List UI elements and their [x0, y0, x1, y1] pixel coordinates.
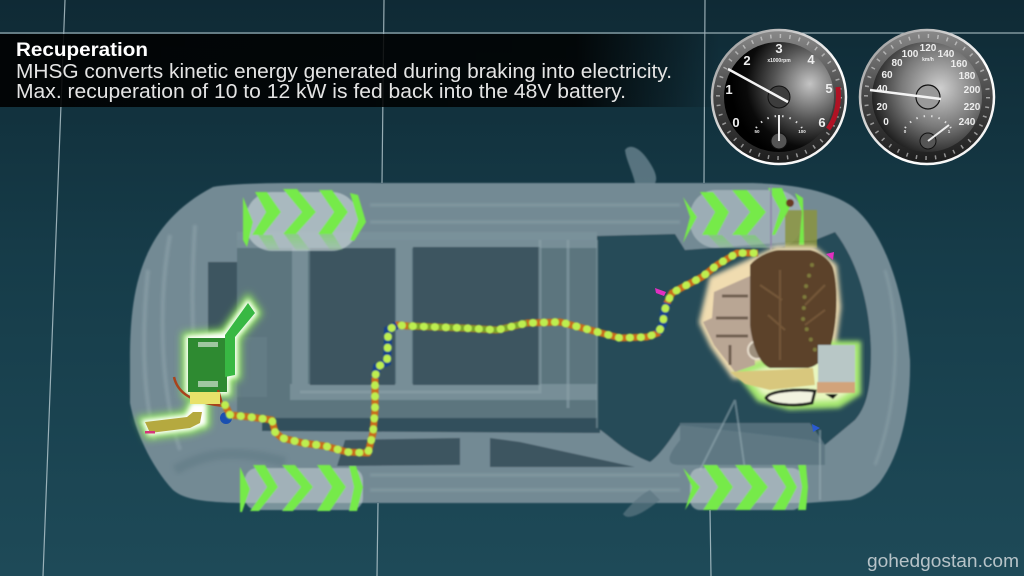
suspension struts	[700, 400, 820, 500]
roof frame	[237, 240, 597, 392]
rear streaks	[144, 225, 205, 450]
engine	[703, 250, 857, 406]
speedometer numerals: 1	[948, 129, 951, 134]
cabling	[174, 377, 225, 406]
speedometer numerals	[876, 43, 981, 134]
side mirror top	[625, 147, 656, 183]
frame highlights around windows	[300, 240, 568, 408]
speedometer numerals: 0	[883, 117, 889, 128]
tachometer numerals: 100	[798, 129, 806, 134]
car body x-ray	[130, 147, 910, 517]
wheel: rear bottom	[240, 465, 363, 512]
yellow cable tray	[145, 412, 202, 433]
speedometer numerals: 180	[959, 71, 976, 82]
speedometer numerals: 220	[964, 102, 981, 113]
speedometer numerals: 160	[951, 59, 968, 70]
tachometer numerals: 4	[807, 52, 815, 67]
tachometer numerals: 50	[754, 129, 760, 134]
description line 1: MHSG converts kinetic energy generated during braking into electricity.	[16, 61, 672, 83]
speedometer numerals: 200	[964, 85, 981, 96]
tachometer gauge	[712, 30, 846, 164]
pink end cap	[145, 431, 155, 434]
green glow	[740, 345, 857, 406]
energy flow chain	[225, 253, 758, 453]
redline arc	[828, 87, 838, 129]
battery case	[188, 338, 227, 392]
description line 2: Max. recuperation of 10 to 12 kW is fed back into the 48V battery.	[16, 81, 626, 103]
speedometer numerals: 40	[876, 84, 888, 95]
speedometer numerals: 0	[904, 129, 907, 134]
caption banner	[0, 34, 720, 107]
connector markers	[655, 252, 834, 432]
engine block detail	[703, 276, 755, 372]
speedometer numerals: 20	[876, 102, 888, 113]
wheel: front top	[683, 186, 817, 250]
heading: Recuperation	[16, 40, 148, 61]
transmission	[730, 368, 815, 390]
coolant sub-gauge	[756, 116, 802, 128]
hub and needle	[916, 85, 940, 109]
speedometer numerals: 80	[891, 58, 903, 69]
engine cover	[750, 250, 837, 368]
tachometer numerals: 1	[725, 82, 733, 97]
tachometer numerals: x1000rpm	[767, 58, 791, 64]
speedometer numerals: km/h	[922, 57, 934, 63]
battery terminals	[198, 342, 218, 387]
tachometer numerals: 5	[825, 81, 833, 96]
wheel: front bottom	[683, 465, 808, 510]
cream glow	[703, 250, 837, 375]
lower bracket	[190, 392, 220, 404]
tachometer numerals: 0	[732, 115, 740, 130]
engine bay	[597, 232, 871, 462]
tachometer numerals	[725, 41, 833, 134]
speedometer numerals: 140	[938, 49, 955, 60]
speedometer numerals: 240	[959, 117, 976, 128]
tachometer numerals: 6	[818, 115, 826, 130]
speedometer numerals: 120	[920, 43, 937, 54]
hub and needle	[768, 86, 790, 108]
green battery module	[145, 303, 255, 434]
faint cable through engine	[803, 265, 815, 350]
sunroof windows	[310, 247, 540, 385]
belt	[766, 390, 815, 405]
wheel: rear top	[243, 189, 366, 251]
roof rail streaks	[370, 205, 895, 490]
duct	[225, 303, 255, 377]
watermark: gohedgostan.com	[867, 551, 1019, 571]
dark lower band	[262, 418, 600, 433]
tachometer numerals: 3	[775, 41, 783, 56]
side mirror bottom	[623, 490, 660, 517]
rear cabin area	[237, 240, 597, 418]
tachometer numerals: 2	[743, 53, 751, 68]
speedometer gauge	[860, 30, 994, 164]
yellow housing	[785, 210, 817, 248]
side windows	[337, 438, 635, 467]
MHSG unit	[818, 345, 855, 382]
speedometer numerals: 100	[902, 49, 919, 60]
front module plate	[669, 423, 825, 465]
speedometer numerals: 60	[881, 70, 893, 81]
fuel sub-gauge	[905, 116, 951, 128]
